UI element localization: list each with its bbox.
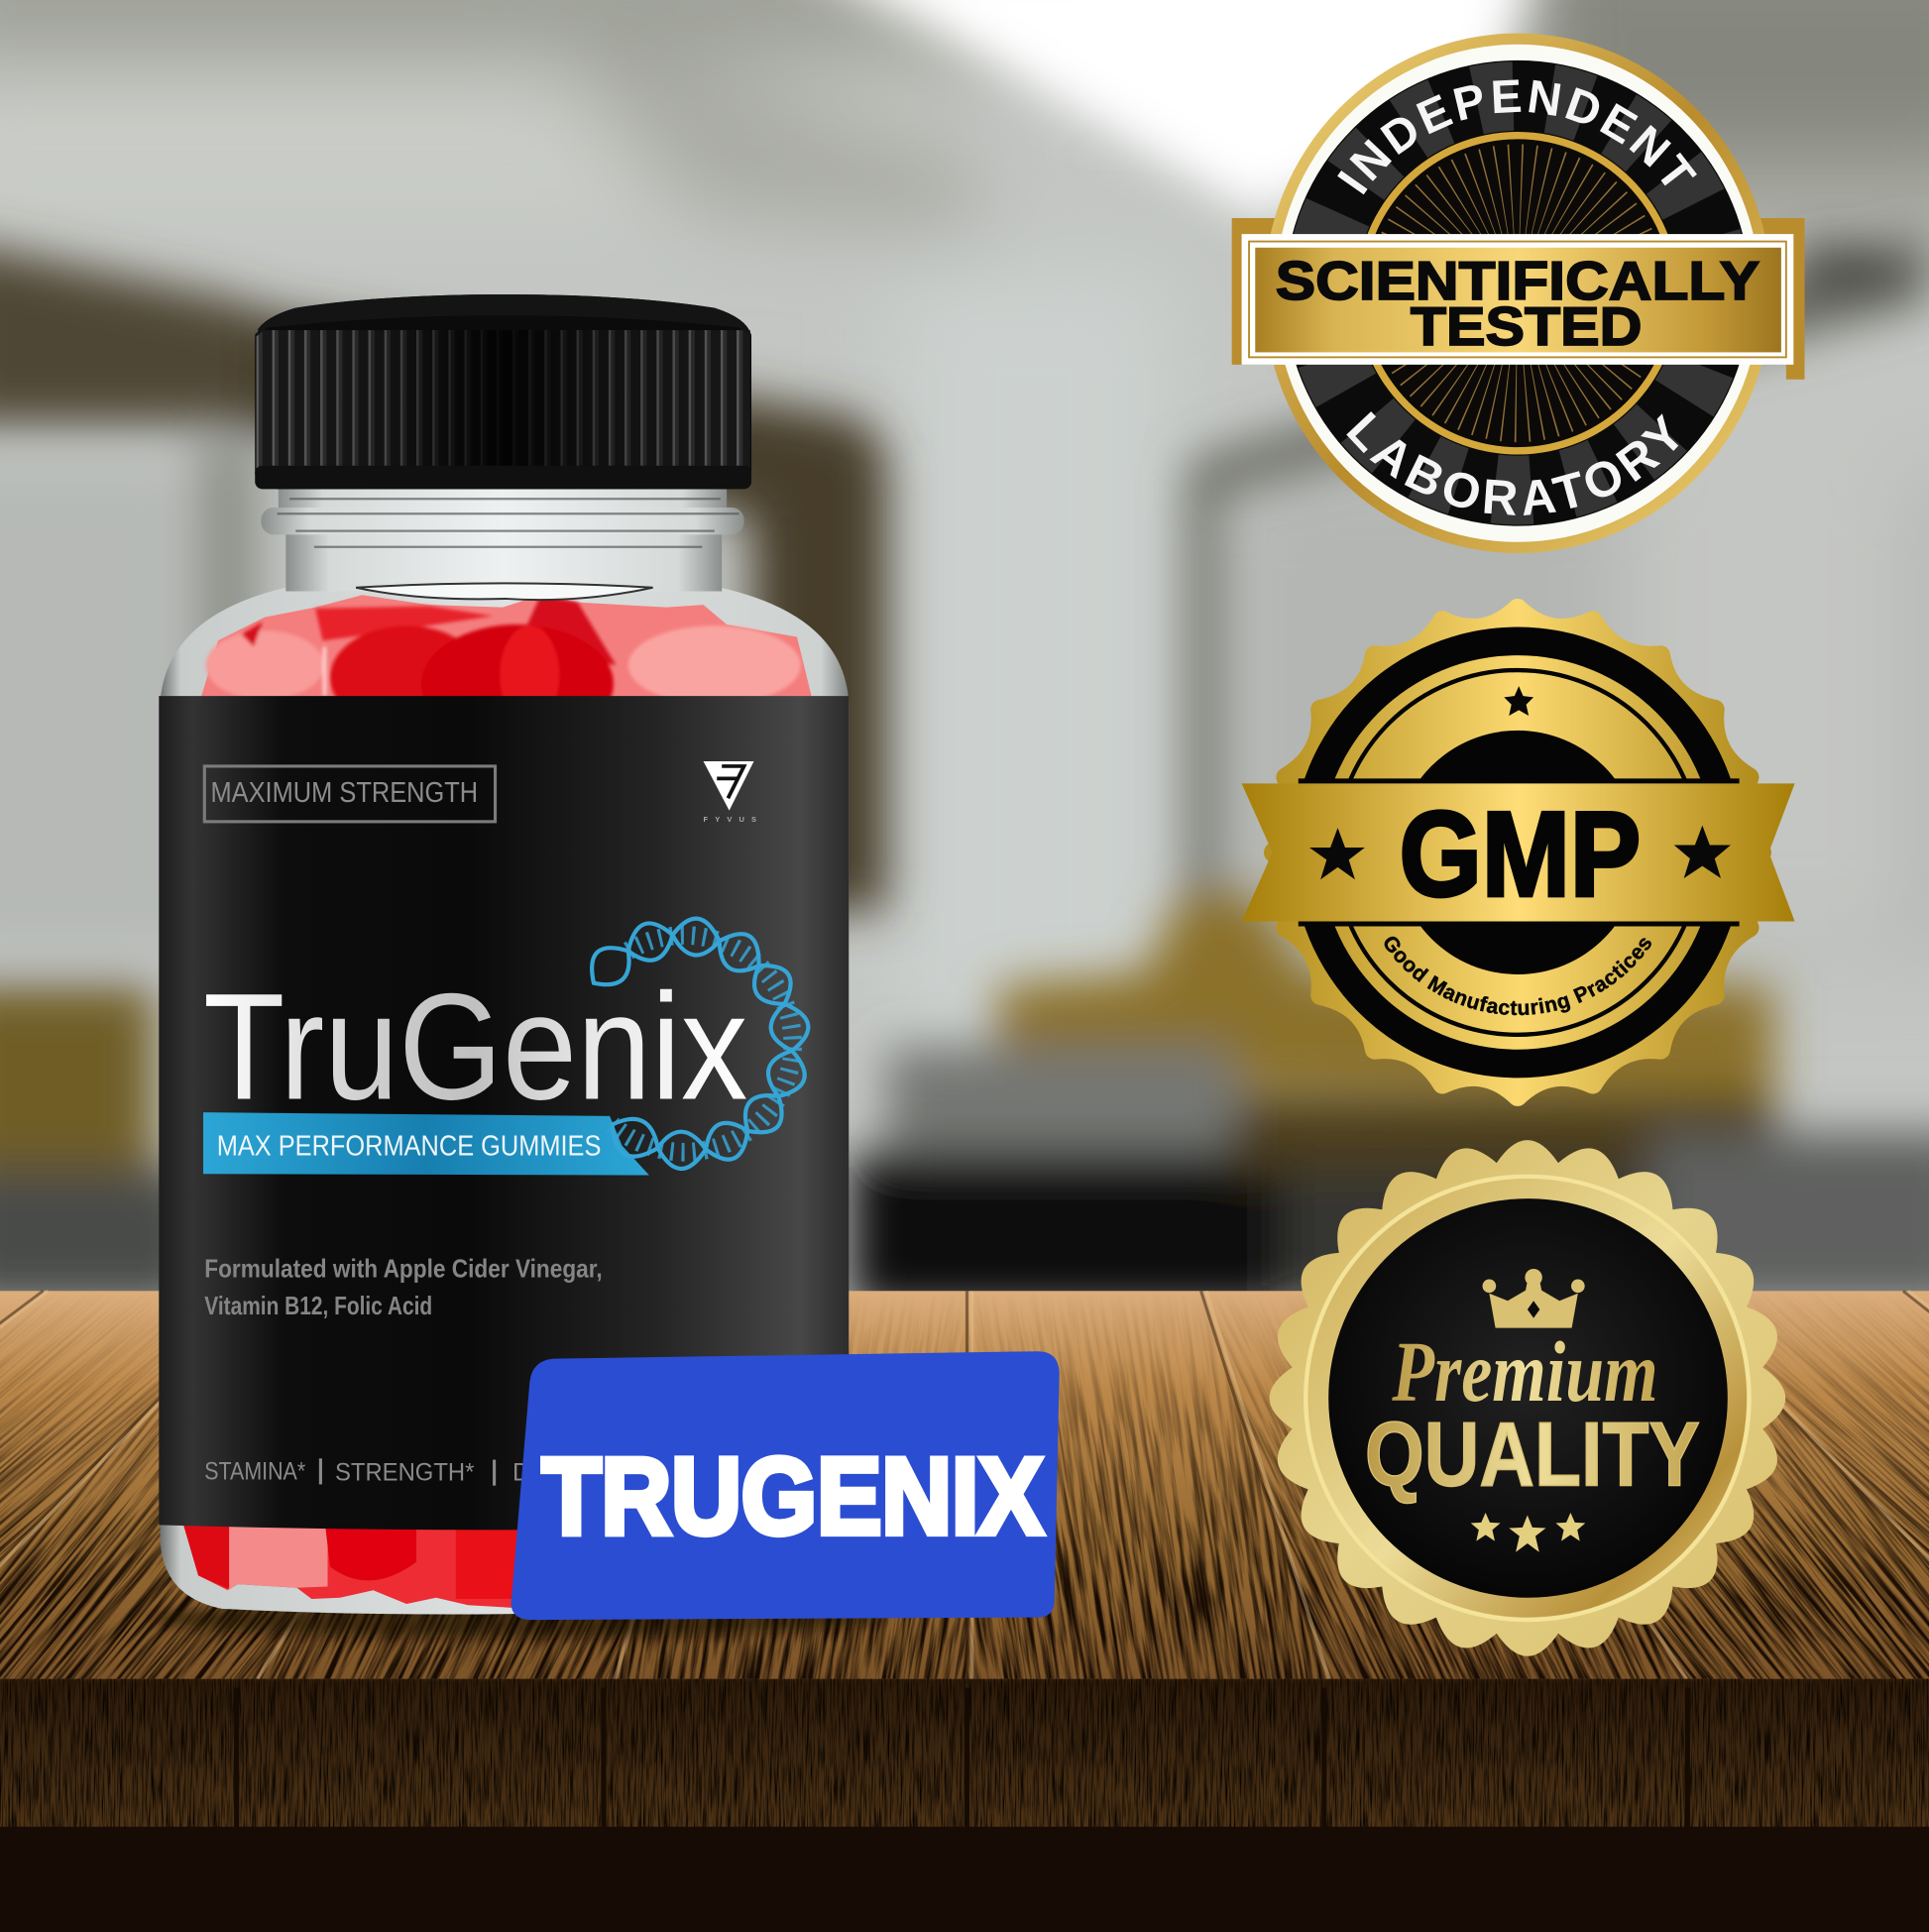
seal bbox=[1274, 609, 1761, 1096]
DNA ring bbox=[592, 919, 808, 1169]
blue brand card bbox=[511, 1351, 1060, 1620]
rear gold plate bbox=[1232, 218, 1804, 380]
ring bbox=[1264, 34, 1771, 553]
product name: TruGenix bbox=[203, 963, 747, 1131]
banner: SCIENTIFICALLY bbox=[1276, 251, 1759, 311]
maximum strength box bbox=[204, 766, 496, 822]
bottle neck bbox=[261, 488, 744, 600]
bottle cap bbox=[255, 294, 751, 489]
benefits line: D bbox=[512, 1460, 530, 1487]
product label bbox=[159, 696, 849, 1530]
banner bbox=[1242, 234, 1793, 365]
good manufacturing text: Good Manufacturing Practices bbox=[1384, 936, 1651, 1015]
crown bbox=[1483, 1269, 1585, 1328]
ribbon: GMP bbox=[1400, 786, 1641, 921]
blue ribbon: MAX PERFORMANCE GUMMIES bbox=[217, 1131, 601, 1163]
benefits line: STAMINA* bbox=[204, 1458, 305, 1485]
small star bbox=[1504, 686, 1533, 716]
independent text: INDEPENDENT bbox=[1337, 79, 1697, 194]
quality text: QUALITY bbox=[1365, 1405, 1700, 1506]
maximum strength box: MAXIMUM STRENGTH bbox=[210, 777, 478, 809]
badge: GMP bbox=[1241, 599, 1794, 1106]
wooden table top bbox=[0, 1291, 1929, 1685]
bottle glass body bbox=[161, 582, 849, 1615]
blue ribbon bbox=[203, 1112, 649, 1176]
stars bbox=[1471, 1513, 1585, 1552]
wooden table front edge bbox=[0, 1679, 1929, 1827]
benefits line bbox=[204, 1458, 530, 1487]
under-table shadow bbox=[0, 1827, 1929, 1932]
blurred room background bbox=[0, 0, 1929, 1311]
brand logo: FYVUS bbox=[704, 815, 756, 824]
benefits line: STRENGTH* bbox=[335, 1460, 475, 1487]
bottle bbox=[159, 294, 849, 1615]
seal bbox=[1270, 1140, 1785, 1656]
brand logo bbox=[704, 761, 756, 824]
ingredient text: Vitamin B12, Folic Acid bbox=[204, 1291, 432, 1320]
blue brand card: TRUGENIX bbox=[542, 1436, 1044, 1557]
ingredient text: Formulated with Apple Cider Vinegar, bbox=[204, 1254, 603, 1284]
bottle shadow bbox=[148, 1599, 887, 1639]
laboratory text: LABORATORY bbox=[1346, 411, 1679, 515]
premium script: Premium bbox=[1391, 1323, 1658, 1420]
gummies top bbox=[201, 595, 811, 696]
banner: TESTED bbox=[1411, 296, 1642, 357]
badge: premium quality bbox=[1270, 1140, 1785, 1656]
badge: scientifically tested bbox=[1231, 34, 1804, 553]
ribbon bbox=[1242, 778, 1795, 926]
ingredient text bbox=[204, 1254, 603, 1320]
gummies bottom bbox=[183, 1525, 529, 1609]
